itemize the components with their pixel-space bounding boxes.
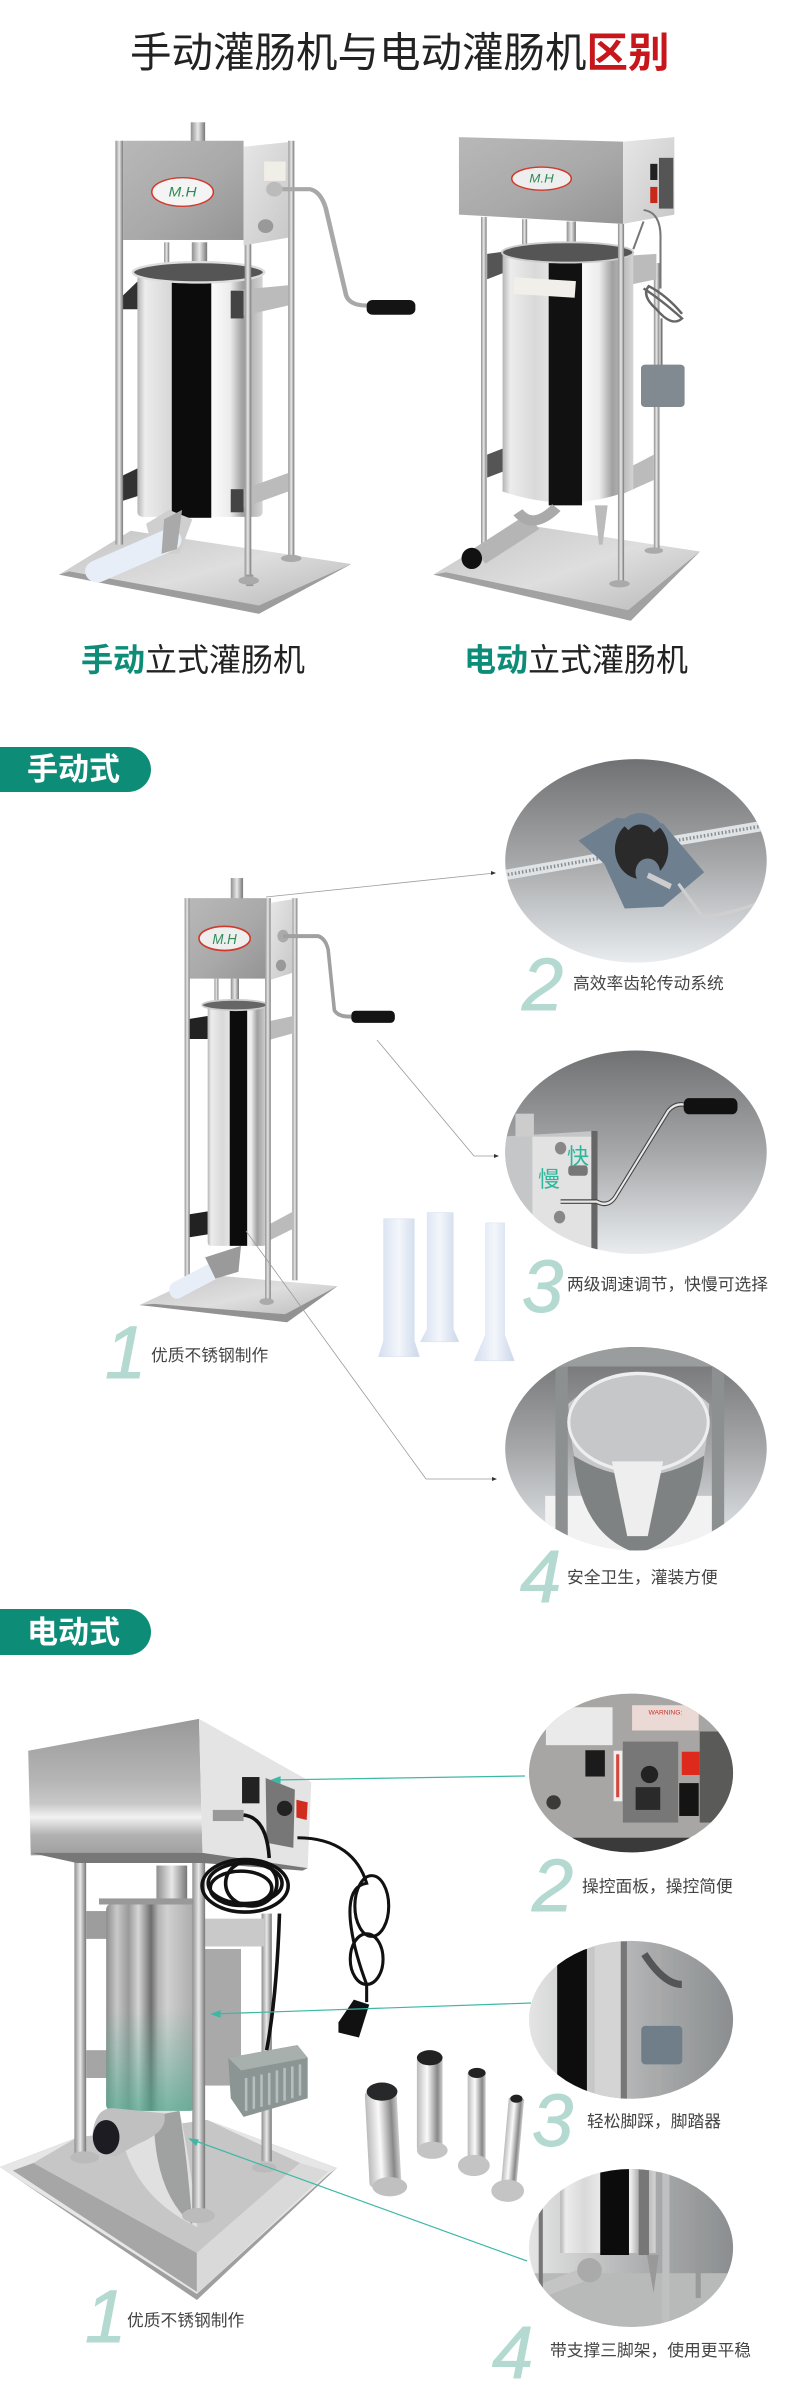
caption 1 manual: 1 [105, 1311, 146, 1394]
heading pill: electric: 电动式 [27, 1615, 120, 1650]
caption 3 electric: 轻松脚踩，脚踏器 [587, 2112, 721, 2131]
caption 3 manual: 两级调速调节，快慢可选择 [567, 1274, 768, 1294]
caption 1 electric: 优质不锈钢制作 [127, 2311, 245, 2330]
caption 4 manual: 4 [520, 1535, 561, 1618]
caption 4 electric [492, 2311, 751, 2389]
caption 2 electric: 2 [531, 1844, 573, 1927]
detail bubble: hopper [505, 1346, 767, 1553]
metal filling tubes [365, 2050, 524, 2202]
heading pill: manual [0, 747, 151, 792]
caption 2 manual: 2 [521, 943, 563, 1026]
speed labels: 慢 [538, 1167, 560, 1192]
manual machine diagram: M.H [212, 931, 238, 948]
caption 3 electric: 3 [532, 2079, 573, 2162]
caption 3 electric [532, 2079, 721, 2162]
detail bubble: control panel: WARNING: [648, 1709, 682, 1716]
detail bubble: foot pedal [529, 1941, 733, 2103]
caption 2 manual: 高效率齿轮传动系统 [573, 974, 724, 993]
caption: electric: 电动立式灌肠机 [464, 642, 688, 678]
caption 2 electric [531, 1844, 733, 1927]
caption 1 electric: 1 [85, 2275, 126, 2358]
caption 3 manual: 3 [522, 1245, 563, 1328]
detail bubble: gear transmission [504, 759, 771, 963]
caption 3 manual [522, 1245, 768, 1328]
detail bubble: crank [502, 1050, 767, 1254]
plastic filling tubes [378, 1213, 514, 1361]
manual machine diagram [139, 878, 395, 1322]
caption: manual: 手动立式灌肠机 [81, 642, 305, 678]
speed labels: 快 [567, 1144, 589, 1169]
caption 4 electric: 带支撑三脚架，使用更平稳 [550, 2340, 751, 2360]
caption 2 electric: 操控面板，操控简便 [582, 1877, 733, 1896]
speed labels [538, 1144, 589, 1192]
product photo: manual sausage stuffer [59, 122, 415, 614]
product photo: manual sausage stuffer: M.H [168, 185, 197, 200]
caption 2 manual [521, 943, 724, 1026]
product photo: electric sausage stuffer: M.H [529, 172, 555, 186]
caption 1 electric [85, 2275, 245, 2358]
callout arrows: electric [190, 1776, 531, 2261]
title: 手动灌肠机与电动灌肠机区别 [130, 29, 670, 76]
caption 4 manual [520, 1535, 718, 1618]
detail bubble: control panel [525, 1694, 741, 1858]
heading pill: electric [0, 1609, 151, 1655]
heading pill: manual: 手动式 [27, 752, 120, 787]
detail bubble: tripod [525, 2166, 741, 2329]
electric machine diagram [0, 1719, 389, 2300]
callout arrows: manual [246, 871, 499, 1481]
product photo: electric sausage stuffer [433, 137, 700, 621]
caption 1 manual [105, 1311, 269, 1394]
caption 4 manual: 安全卫生，灌装方便 [567, 1568, 718, 1587]
caption 1 manual: 优质不锈钢制作 [151, 1346, 269, 1365]
